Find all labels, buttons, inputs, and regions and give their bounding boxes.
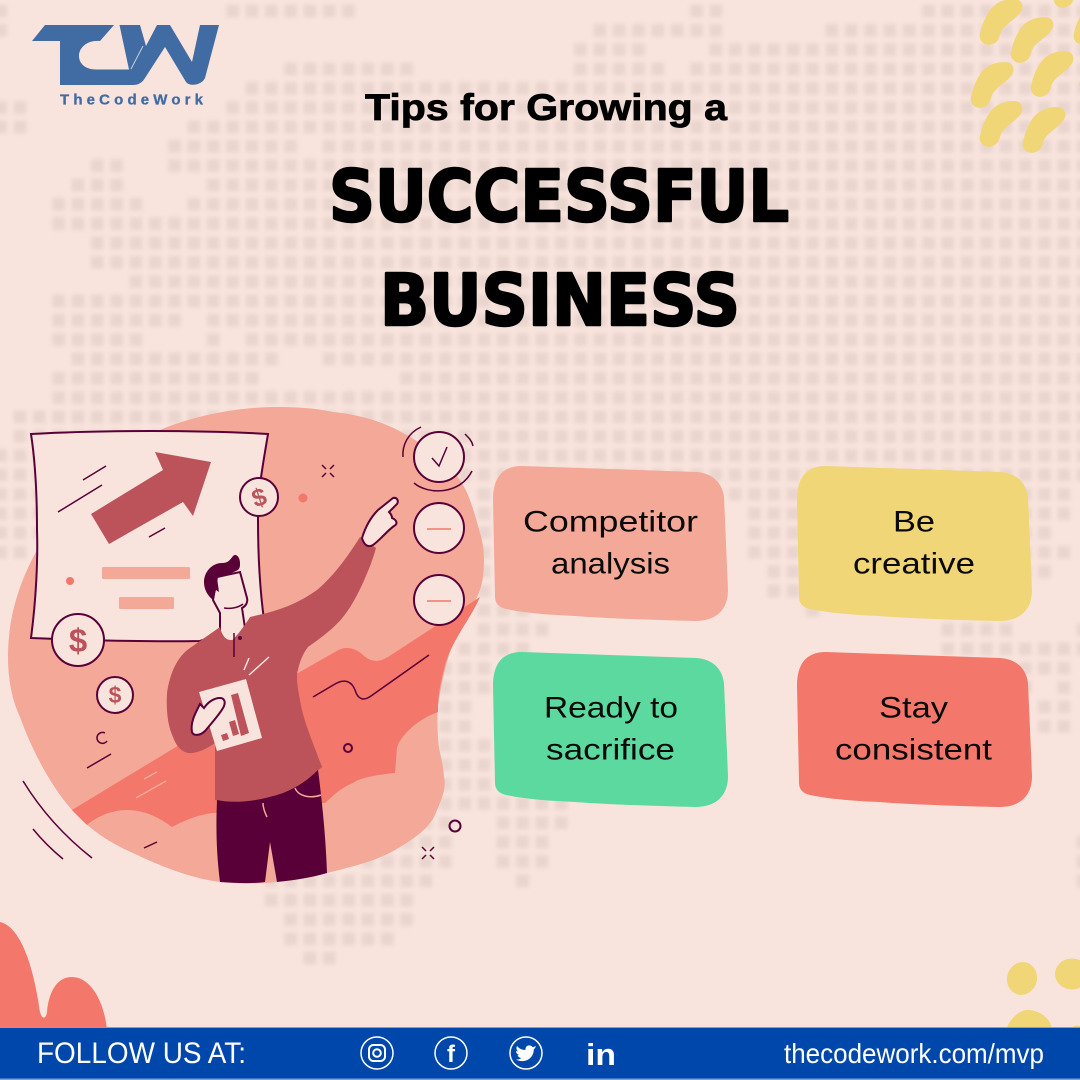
card: be creative (797, 466, 1032, 621)
coin large (52, 614, 104, 666)
chest lines (244, 657, 269, 675)
hair (204, 555, 240, 600)
coin top: $ (248, 482, 270, 513)
card: competitor analysis: Competitor (523, 506, 698, 538)
follow us text: FOLLOW US AT: (37, 1037, 246, 1070)
poster lines (58, 466, 165, 537)
poster dot and bars (66, 567, 190, 609)
pocket lines (263, 788, 321, 817)
background blob (8, 407, 484, 884)
icon: facebook: f (447, 1041, 456, 1068)
growth arrow (91, 452, 211, 544)
coral shape bottom left (0, 922, 107, 1030)
heading: successful: SUCCESSFUL (329, 155, 789, 238)
coin small (97, 677, 133, 713)
coin large: $ (69, 622, 87, 659)
card: stay consistent: Stay (879, 692, 948, 724)
light streaks (136, 772, 166, 798)
yellow beans top right (972, 0, 1080, 151)
pointing hand (362, 498, 398, 546)
tablet (199, 679, 262, 751)
decorative marks (23, 465, 460, 859)
logo (32, 25, 219, 108)
head and neck (213, 572, 247, 642)
holding hand (192, 698, 225, 735)
coral band (72, 597, 480, 827)
logo: TheCodeWork (60, 92, 204, 108)
card: ready to sacrifice: Ready to (544, 692, 678, 724)
collar (234, 633, 242, 657)
icon: facebook (435, 1037, 467, 1069)
illustration: businessman pointing at checklist (8, 407, 484, 884)
heading: business: BUSINESS (380, 259, 740, 342)
title (329, 87, 789, 342)
card: competitor analysis (493, 466, 728, 621)
icon: linkedin: in (586, 1037, 616, 1072)
card: stay consistent: consistent (835, 734, 993, 766)
icon: instagram (361, 1037, 393, 1069)
checklist circles (403, 427, 473, 625)
pants (216, 770, 327, 883)
footer bar (0, 1027, 1080, 1080)
card: stay consistent (797, 652, 1032, 807)
subtitle: Tips for Growing a (365, 87, 727, 128)
poster panel (31, 431, 268, 641)
coin top (240, 478, 278, 516)
card: ready to sacrifice (493, 652, 728, 807)
card: be creative: creative (853, 548, 975, 580)
coin small: $ (109, 682, 122, 708)
card: be creative: Be (893, 506, 935, 538)
icon: twitter (510, 1037, 542, 1069)
website text: thecodework.com/mvp (784, 1038, 1044, 1069)
sweater (167, 537, 376, 803)
card: ready to sacrifice: sacrifice (546, 734, 675, 766)
card: competitor analysis: analysis (551, 548, 670, 580)
jaw line (224, 604, 243, 608)
yellow shapes bottom right (1003, 958, 1080, 1030)
